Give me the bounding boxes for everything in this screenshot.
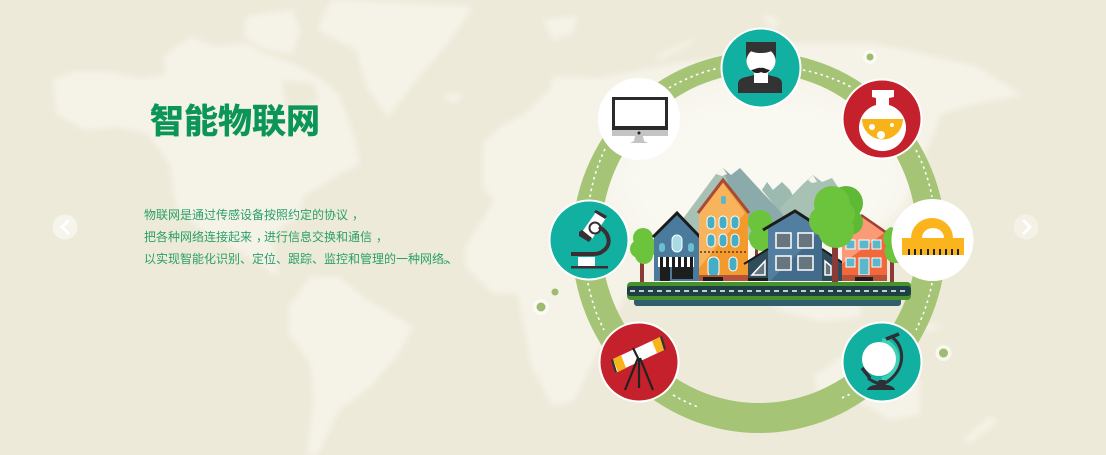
coral house	[842, 215, 887, 281]
left tree	[630, 228, 658, 282]
map: greenland	[317, 0, 473, 117]
icon: microscope	[548, 200, 630, 280]
map: south america	[289, 277, 413, 455]
mountains	[682, 168, 850, 240]
icon: flask	[842, 78, 922, 160]
description text: 物联网是通过传感设备按照约定的协议 ，	[144, 208, 364, 222]
map: hudson bay	[282, 80, 319, 112]
icon: monitor	[598, 78, 680, 160]
description text	[144, 208, 458, 266]
blue house	[653, 213, 700, 281]
carousel arrow: right	[1014, 214, 1038, 240]
road	[627, 282, 911, 306]
title: 智能物联网	[150, 103, 320, 141]
town illustration	[627, 168, 911, 306]
green ring road	[572, 52, 946, 433]
map: north america	[53, 37, 360, 277]
icon: telescope	[598, 322, 680, 402]
description text: 把各种网络连接起来 ，进行信息交换和通信 ，	[144, 230, 388, 244]
decorative dots	[533, 50, 952, 361]
icon: person	[720, 28, 802, 108]
map: arctic arc	[655, 38, 695, 60]
large tree	[809, 186, 863, 282]
carousel arrow: left	[52, 214, 78, 240]
description text: 以实现智能化识别、定位、跟踪、监控和管理的一种网络。、	[144, 252, 458, 266]
icon: globe	[842, 322, 922, 402]
icon: ruler	[892, 199, 974, 281]
orange house	[698, 180, 749, 281]
map: eurasia and africa	[466, 43, 1022, 407]
map: australia	[814, 353, 920, 420]
right tree	[883, 227, 905, 282]
map: arctic islands	[243, 10, 300, 53]
map: newfoundland	[444, 93, 462, 102]
map: scandinavia	[543, 17, 578, 40]
middle tree	[748, 210, 775, 258]
slate house	[744, 211, 843, 281]
map: indonesia	[906, 320, 945, 333]
map: arctic patch	[761, 13, 779, 30]
map: new zealand	[963, 417, 998, 443]
ring interior highlight	[610, 85, 910, 275]
